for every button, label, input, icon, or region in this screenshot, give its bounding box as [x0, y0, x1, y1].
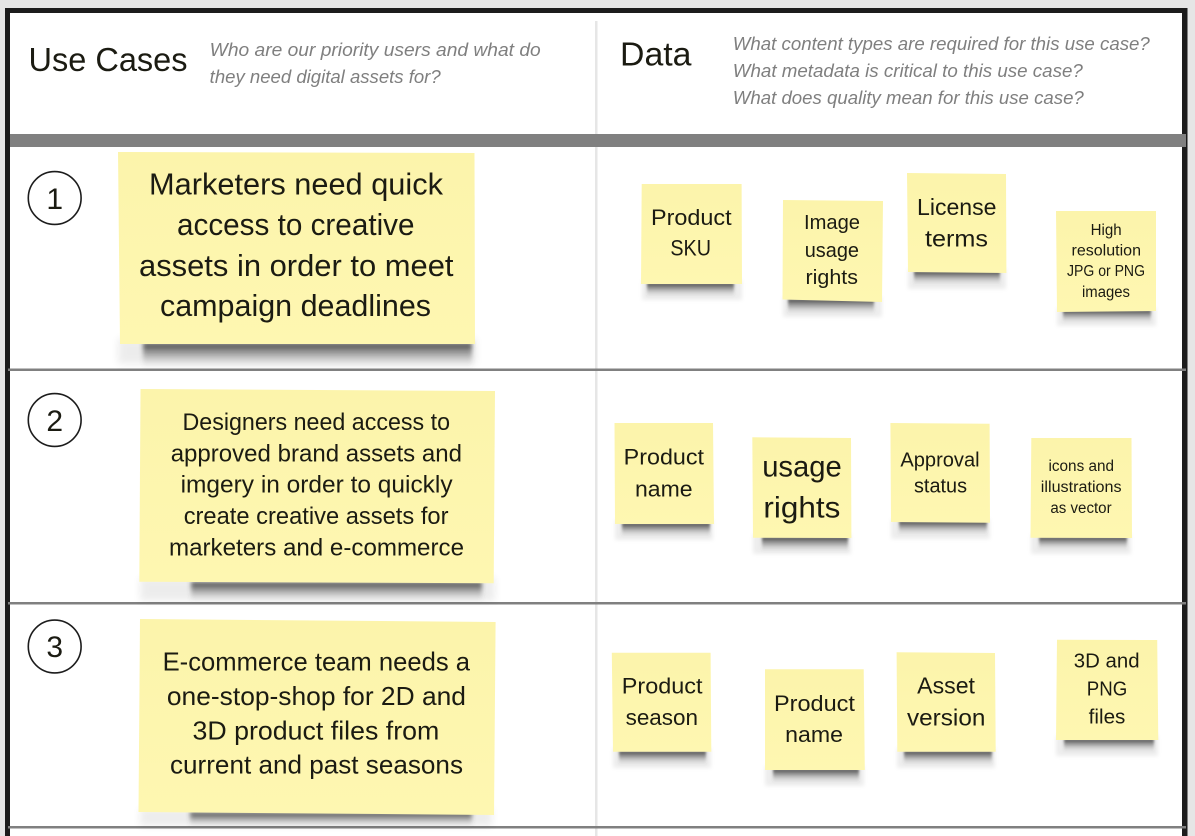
sticky note: designers: approved brand assets and [171, 441, 462, 468]
sticky note: Product SKU: Product [651, 205, 732, 230]
sticky note: usage rights: rights [763, 492, 840, 525]
prompt: data questions [733, 33, 1151, 108]
sticky note: 3D and PNG files: 3D and [1074, 649, 1140, 672]
sticky note: Asset version: version [907, 705, 985, 731]
sticky note: icons and illustrations: as vector [1050, 500, 1112, 517]
title: Data: Data [620, 36, 692, 72]
sticky note: icons and illustrations [1030, 438, 1132, 554]
number badge 3 [28, 620, 81, 673]
sticky note: Product name [765, 669, 865, 786]
sticky note: e-commerce [138, 619, 496, 827]
sticky note: Product name [614, 423, 714, 540]
sticky note: marketers [118, 152, 476, 368]
sticky note: marketers: Marketers need quick [149, 166, 443, 202]
sticky note: Product name: name [635, 476, 693, 501]
number badge 3: 3 [46, 631, 63, 664]
sticky note: License terms: License [917, 194, 996, 220]
sticky note: e-commerce: current and past seasons [170, 750, 463, 780]
sticky note: Approval status: Approval [900, 450, 980, 472]
sticky note: Product season: season [626, 705, 698, 730]
sticky note: icons and illustrations: illustrations [1041, 479, 1122, 496]
sticky note: Image usage rights [782, 200, 883, 317]
sticky note: Image usage rights: rights [806, 266, 858, 289]
sticky note: designers: marketers and e-commerce [169, 534, 464, 561]
sticky note: marketers: campaign deadlines [160, 288, 431, 323]
sticky note: 3D and PNG files: PNG [1087, 678, 1127, 701]
sticky note: Product name: name [785, 722, 843, 747]
sticky note: e-commerce: E-commerce team needs a [163, 647, 471, 677]
sticky note: License terms: terms [925, 226, 988, 252]
sticky note: License terms [907, 173, 1006, 289]
sticky note: Approval status [890, 423, 990, 539]
sticky note: Product SKU [641, 184, 742, 300]
sticky note: High resolution: High [1091, 222, 1122, 239]
sticky note: designers [139, 389, 495, 602]
number badge 1 [28, 172, 81, 224]
prompt: use cases questions [210, 39, 541, 87]
number badge 1: 1 [46, 183, 63, 216]
sticky note: Asset version [897, 652, 996, 768]
sticky note: 3D and PNG files [1056, 640, 1158, 756]
sticky note: Product season [612, 653, 711, 768]
title: Use Cases: Use Cases [28, 41, 188, 78]
sticky note: Product season: Product [622, 674, 703, 699]
sticky note: marketers: access to creative [177, 207, 414, 242]
sticky note: usage rights [752, 437, 851, 554]
sticky note: usage rights: usage [762, 451, 842, 484]
prompt: use cases questions: they need digital assets for? [210, 66, 441, 87]
sticky note: e-commerce: 3D product files from [192, 716, 439, 746]
sticky note: High resolution: resolution [1072, 243, 1141, 260]
row 1 [28, 152, 1156, 368]
prompt: data questions: What does quality mean for this use case? [733, 87, 1085, 108]
row 2 [28, 389, 1132, 602]
sticky note: e-commerce: one-stop-shop for 2D and [167, 681, 466, 711]
sticky note: designers: imgery in order to quickly [181, 472, 453, 499]
number badge 2 [28, 394, 81, 446]
heading: data [620, 33, 1151, 108]
sticky note: designers: Designers need access to [182, 409, 450, 436]
prompt: use cases questions: Who are our priority users and what do [210, 39, 541, 60]
sticky note: 3D and PNG files: files [1089, 706, 1125, 729]
row 3 [28, 619, 1158, 827]
sticky note: Product SKU: SKU [670, 236, 711, 261]
sticky note: Product name: Product [774, 691, 856, 716]
sticky note: Image usage rights: Image [804, 211, 860, 234]
sticky note: Asset version: Asset [917, 673, 976, 699]
prompt: data questions: What content types are required for this use case? [733, 33, 1151, 54]
number badge 2: 2 [46, 405, 63, 438]
sticky note: Approval status: status [914, 475, 967, 497]
sticky note: Image usage rights: usage [805, 239, 859, 262]
sticky note: icons and illustrations: icons and [1048, 458, 1114, 475]
sticky note: designers: create creative assets for [184, 503, 448, 530]
prompt: data questions: What metadata is critical to this use case? [733, 60, 1084, 81]
sticky note: Product name: Product [624, 445, 705, 470]
sticky note: High resolution: images [1082, 284, 1130, 301]
sticky note: High resolution: JPG or PNG [1067, 263, 1145, 280]
sticky note: marketers: assets in order to meet [139, 248, 454, 283]
sticky note: High resolution [1056, 211, 1156, 326]
heading: use cases [28, 39, 541, 87]
